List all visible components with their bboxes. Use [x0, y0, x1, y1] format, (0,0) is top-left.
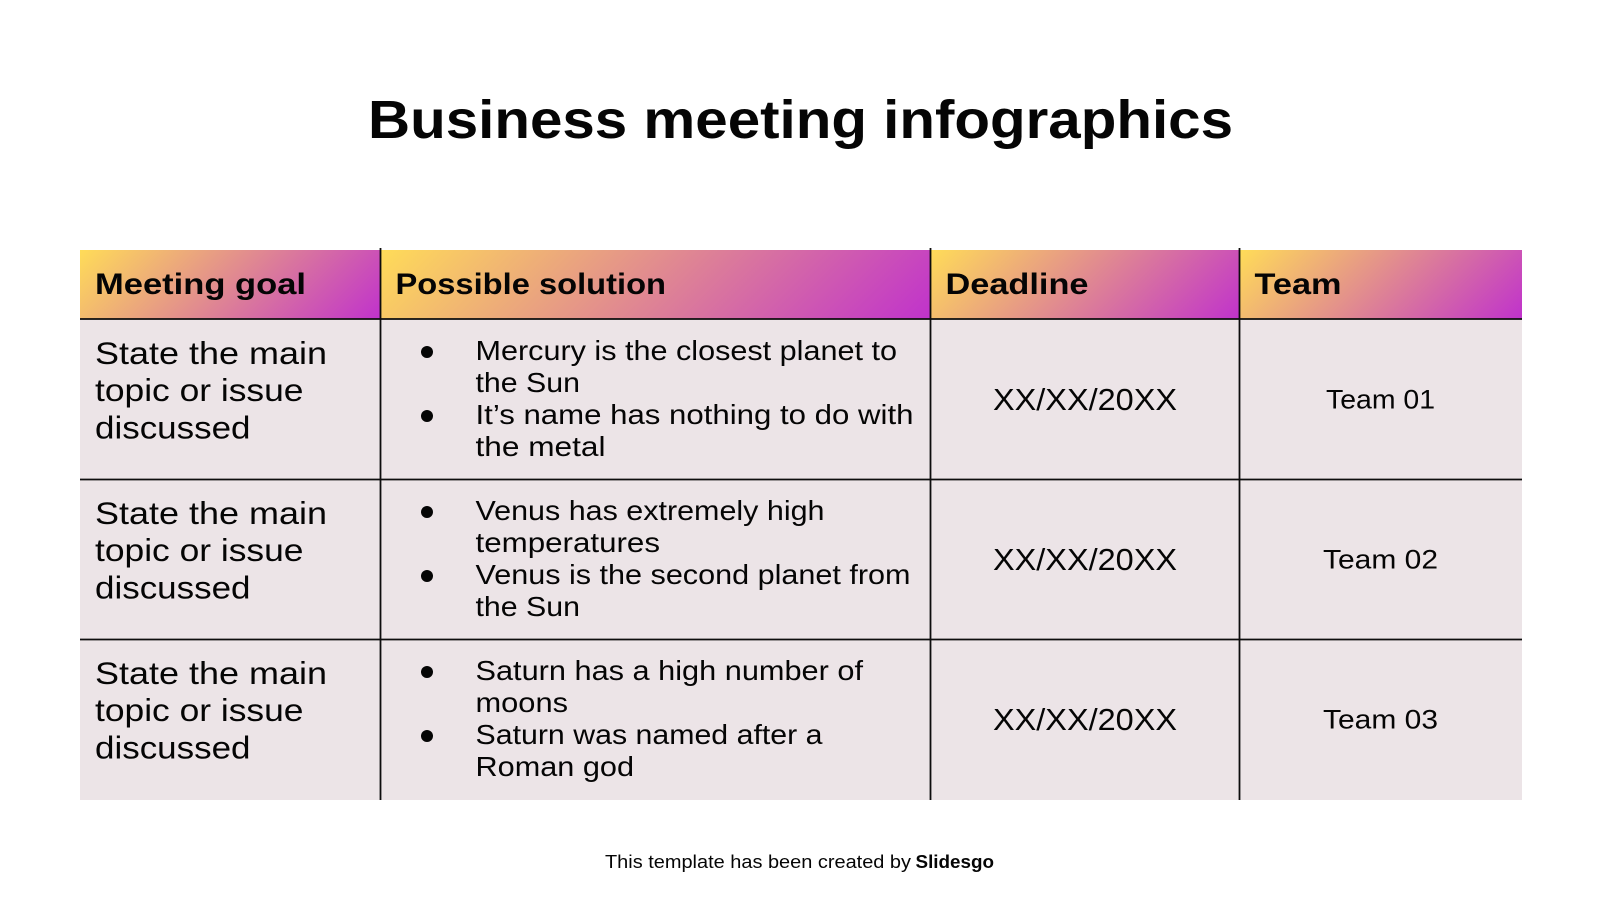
table [80, 248, 1522, 800]
row 3 meeting goal: topic or issue [95, 692, 304, 728]
row 3 possible solutions: Saturn has a high number of [476, 655, 863, 686]
row 2 possible solutions: the Sun [476, 591, 580, 622]
row 1 deadline: XX/XX/20XX [993, 383, 1177, 417]
row 2 team: Team 02 [1323, 544, 1438, 574]
row 1 possible solutions [421, 335, 914, 462]
row 1 [95, 335, 1435, 462]
header cell: possible solution [380, 250, 931, 319]
row 2 meeting goal [95, 495, 327, 606]
row 2 possible solutions: Venus is the second planet from [476, 559, 910, 590]
row 1 meeting goal: discussed [95, 410, 250, 446]
row 1 team: Team 01 [1326, 384, 1435, 414]
header cell: possible solution: Possible solution [396, 268, 666, 301]
row 3 possible solutions [421, 655, 863, 782]
row 2 possible solutions: Venus has extremely high [476, 495, 824, 526]
header cell: deadline [931, 250, 1240, 319]
row 3 meeting goal: State the main [95, 655, 327, 691]
header row [80, 250, 1522, 319]
row 1 possible solutions: Mercury is the closest planet to [476, 335, 897, 366]
title: Business meeting infographics [368, 90, 1233, 150]
header cell: team [1240, 250, 1522, 319]
row 1 possible solutions: the metal [476, 431, 606, 462]
footer credit: Slidesgo [916, 852, 994, 872]
header cell: meeting goal: Meeting goal [95, 268, 306, 301]
header cell: deadline: Deadline [946, 268, 1088, 301]
row 2 deadline: XX/XX/20XX [993, 543, 1177, 577]
row 1 meeting goal: State the main [95, 335, 327, 371]
header cell: meeting goal [80, 250, 380, 319]
row 3 possible solutions: Roman god [476, 751, 634, 782]
row 2 meeting goal: State the main [95, 495, 327, 531]
row 3 possible solutions: moons [476, 687, 568, 718]
row 3 [95, 655, 1438, 782]
row 1 possible solutions: the Sun [476, 367, 580, 398]
row 1 meeting goal: topic or issue [95, 372, 304, 408]
row 3 meeting goal [95, 655, 327, 766]
row 3 possible solutions: Saturn was named after a [476, 719, 823, 750]
row 2 [95, 495, 1438, 622]
row 2 possible solutions: temperatures [476, 527, 660, 558]
table body background [80, 319, 1522, 800]
row 1 meeting goal [95, 335, 327, 446]
row 2 meeting goal: topic or issue [95, 532, 304, 568]
row 3 meeting goal: discussed [95, 730, 250, 766]
row 2 meeting goal: discussed [95, 570, 250, 606]
footer credit: This template has been created by [605, 852, 911, 872]
row 3 team: Team 03 [1323, 704, 1438, 734]
row 3 deadline: XX/XX/20XX [993, 703, 1177, 737]
header cell: team: Team [1254, 268, 1342, 301]
row 1 possible solutions: It’s name has nothing to do with [476, 399, 914, 430]
row 2 possible solutions [421, 495, 910, 622]
